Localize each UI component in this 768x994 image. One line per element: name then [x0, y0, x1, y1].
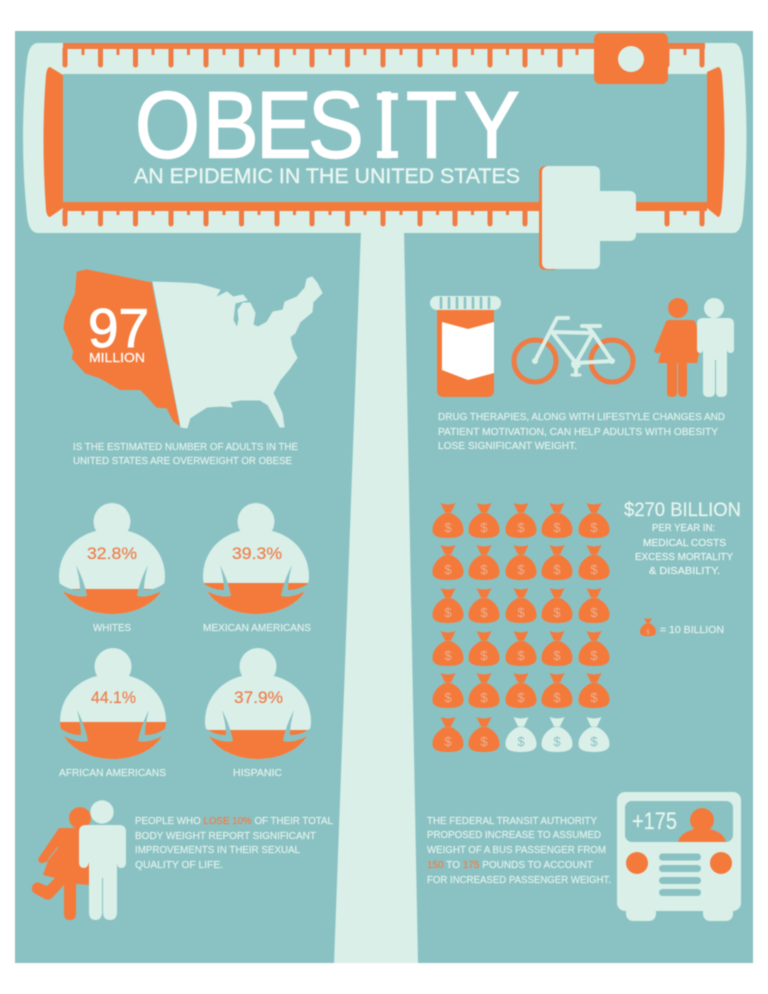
cost stat: MEDICAL COSTS	[643, 538, 726, 549]
bottom ruler marks	[63, 202, 707, 224]
percentages: 37.9%	[234, 688, 283, 707]
woman kicking	[32, 807, 91, 920]
map caption: IS THE ESTIMATED NUMBER OF ADULTS IN THE	[73, 442, 298, 453]
woman	[654, 298, 701, 397]
figure: african americans 44.1%	[56, 648, 170, 759]
headlights	[626, 852, 648, 874]
97 million stat: 97	[88, 297, 149, 359]
money bag grid: $	[590, 562, 598, 577]
man	[79, 800, 126, 920]
transit caption	[427, 816, 611, 886]
weight loss caption: LOSE SIGNIFICANT WEIGHT.	[438, 441, 577, 452]
ruler window	[63, 74, 707, 202]
map caption	[73, 442, 298, 467]
group labels: MEXICAN AMERICANS	[203, 623, 311, 634]
weight loss caption: DRUG THERAPIES, ALONG WITH LIFESTYLE CHANGES AND	[438, 412, 725, 423]
group labels: WHITES	[93, 623, 131, 634]
money bag grid: $	[480, 520, 488, 535]
group labels: AFRICAN AMERICANS	[59, 768, 166, 779]
+175 label: +175	[632, 808, 677, 835]
figure: hispanic 37.9%	[201, 648, 315, 759]
money bag grid: $	[444, 562, 452, 577]
icon: bicycle	[514, 318, 633, 382]
sexual quality caption: PEOPLE WHO LOSE 10% OF THEIR TOTAL	[135, 816, 333, 827]
scale post	[334, 230, 418, 963]
money bag grid: $	[517, 605, 525, 620]
scale ruler header	[23, 33, 746, 270]
money bag grid: $	[553, 605, 561, 620]
bag legend: = 10 BILLION	[660, 625, 724, 636]
figure: whites 32.8%	[55, 503, 169, 614]
money bag grid	[432, 503, 610, 752]
transit caption: 150 TO 175 POUNDS TO ACCOUNT	[427, 860, 593, 871]
percentages	[87, 544, 283, 707]
bag legend: $	[646, 630, 650, 636]
money bag grid: $	[517, 690, 525, 705]
sliding clip	[594, 33, 668, 84]
sexual quality caption: BODY WEIGHT REPORT SIGNIFICANT	[135, 831, 316, 842]
money bag grid: $	[553, 520, 561, 535]
money bag grid: $	[480, 690, 488, 705]
cost stat	[624, 500, 741, 577]
cost stat: EXCESS MORTALITY	[635, 552, 733, 563]
cost stat: & DISABILITY.	[649, 566, 720, 577]
map: western states	[63, 269, 180, 426]
icon: pill bottle	[430, 296, 501, 397]
icon: couple embracing	[32, 800, 126, 920]
icon: couple standing	[654, 298, 734, 397]
slider handle	[539, 166, 636, 270]
map: eastern states	[153, 277, 322, 428]
top ruler marks	[63, 43, 705, 65]
map caption: UNITED STATES ARE OVERWEIGHT OR OBESE	[73, 456, 292, 467]
sexual quality caption	[135, 816, 333, 871]
97 million stat: MILLION	[89, 350, 145, 365]
weight loss caption: PATIENT MOTIVATION, CAN HELP ADULTS WITH OBESITY	[438, 427, 718, 438]
percentages: 44.1%	[91, 688, 136, 707]
money bag grid: $	[590, 520, 598, 535]
money bag grid: $	[590, 605, 598, 620]
money bag grid: $	[553, 734, 561, 749]
money bag grid: $	[444, 690, 452, 705]
money bag grid: $	[480, 605, 488, 620]
ruler frame	[23, 43, 746, 233]
money bag grid: $	[590, 734, 598, 749]
cost stat: $270 BILLION	[624, 500, 741, 521]
man	[697, 298, 734, 397]
percentages: 32.8%	[87, 544, 137, 563]
money bag grid: $	[517, 520, 525, 535]
passenger	[678, 808, 726, 842]
money bag grid: $	[590, 690, 598, 705]
money bag grid: $	[444, 520, 452, 535]
money bag grid: $	[444, 734, 452, 749]
transit caption: WEIGHT OF A BUS PASSENGER FROM	[427, 845, 606, 856]
group labels: HISPANIC	[233, 768, 282, 779]
money bag grid: $	[553, 690, 561, 705]
money bag grid: $	[553, 648, 561, 663]
money bag grid: $	[553, 562, 561, 577]
cost stat: PER YEAR IN:	[652, 523, 715, 534]
US map	[63, 269, 322, 428]
bus window	[625, 801, 733, 842]
figure: mexican americans 39.3%	[199, 503, 313, 614]
grille	[659, 854, 701, 896]
transit caption: FOR INCREASED PASSENGER WEIGHT.	[427, 875, 611, 886]
money bag grid: $	[517, 562, 525, 577]
subtitle: AN EPIDEMIC IN THE UNITED STATES	[134, 165, 520, 188]
transit caption: THE FEDERAL TRANSIT AUTHORITY	[427, 816, 597, 827]
group labels	[59, 623, 311, 779]
money bag grid: $	[480, 648, 488, 663]
title: OBESITY	[135, 72, 520, 178]
money bag grid: $	[480, 562, 488, 577]
bag legend	[640, 618, 724, 636]
money bag grid: $	[517, 648, 525, 663]
left jaw	[44, 67, 63, 217]
icon: bus	[617, 792, 741, 921]
weight loss caption	[438, 412, 725, 452]
money bag grid: $	[517, 734, 525, 749]
percentages: 39.3%	[232, 544, 282, 563]
right jaw	[707, 67, 724, 217]
money bag grid: $	[480, 734, 488, 749]
money bag grid: $	[444, 648, 452, 663]
money bag grid: $	[590, 648, 598, 663]
money bag grid: $	[444, 605, 452, 620]
sexual quality caption: QUALITY OF LIFE.	[135, 860, 223, 871]
transit caption: PROPOSED INCREASE TO ASSUMED	[427, 830, 601, 841]
sexual quality caption: IMPROVEMENTS IN THEIR SEXUAL	[135, 845, 300, 856]
